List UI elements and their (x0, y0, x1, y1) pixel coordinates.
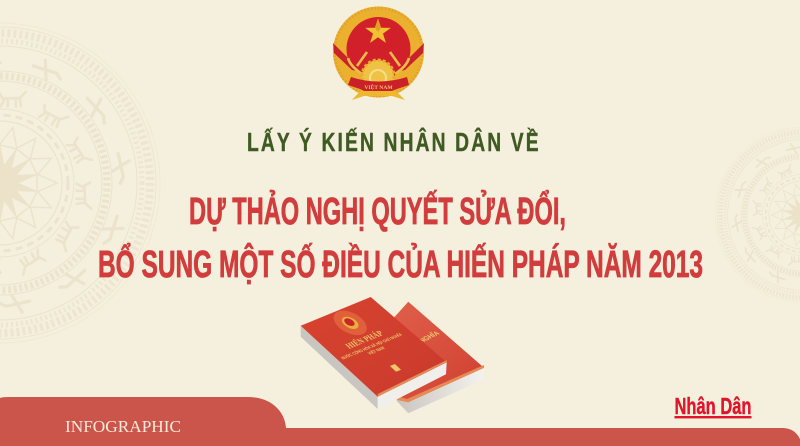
icon: national emblem of Vietnam: VIỆT NAM (364, 83, 393, 91)
decorative bronze drum: left (0, 23, 160, 343)
icon: front constitution book (301, 297, 447, 409)
icon: back constitution book: NGHĨA (416, 329, 442, 344)
book cover content (305, 300, 428, 383)
book emblem (327, 307, 374, 339)
title line 1: DỰ THẢO NGHỊ QUYẾT SỬA ĐỔI, (189, 188, 566, 233)
book subtitle country: VIỆT NAM (366, 345, 386, 356)
logo: Nhân Dân: Nhân Dân (674, 393, 752, 419)
title (98, 188, 703, 286)
icon: back constitution book (390, 302, 484, 413)
heading: subtitle: LẤY Ý KIẾN NHÂN DÂN VỀ (247, 127, 539, 157)
footer band (0, 397, 800, 446)
book subtitle: NƯỚC CỘNG HÒA XÃ HỘI CHỦ NGHĨA (340, 332, 403, 360)
book publisher mark (390, 364, 401, 372)
book title: HIẾN PHÁP (342, 328, 386, 350)
footer label: INFOGRAPHIC (65, 417, 181, 436)
decorative bronze drum: right (715, 127, 800, 303)
icon: national emblem of Vietnam (333, 6, 424, 100)
